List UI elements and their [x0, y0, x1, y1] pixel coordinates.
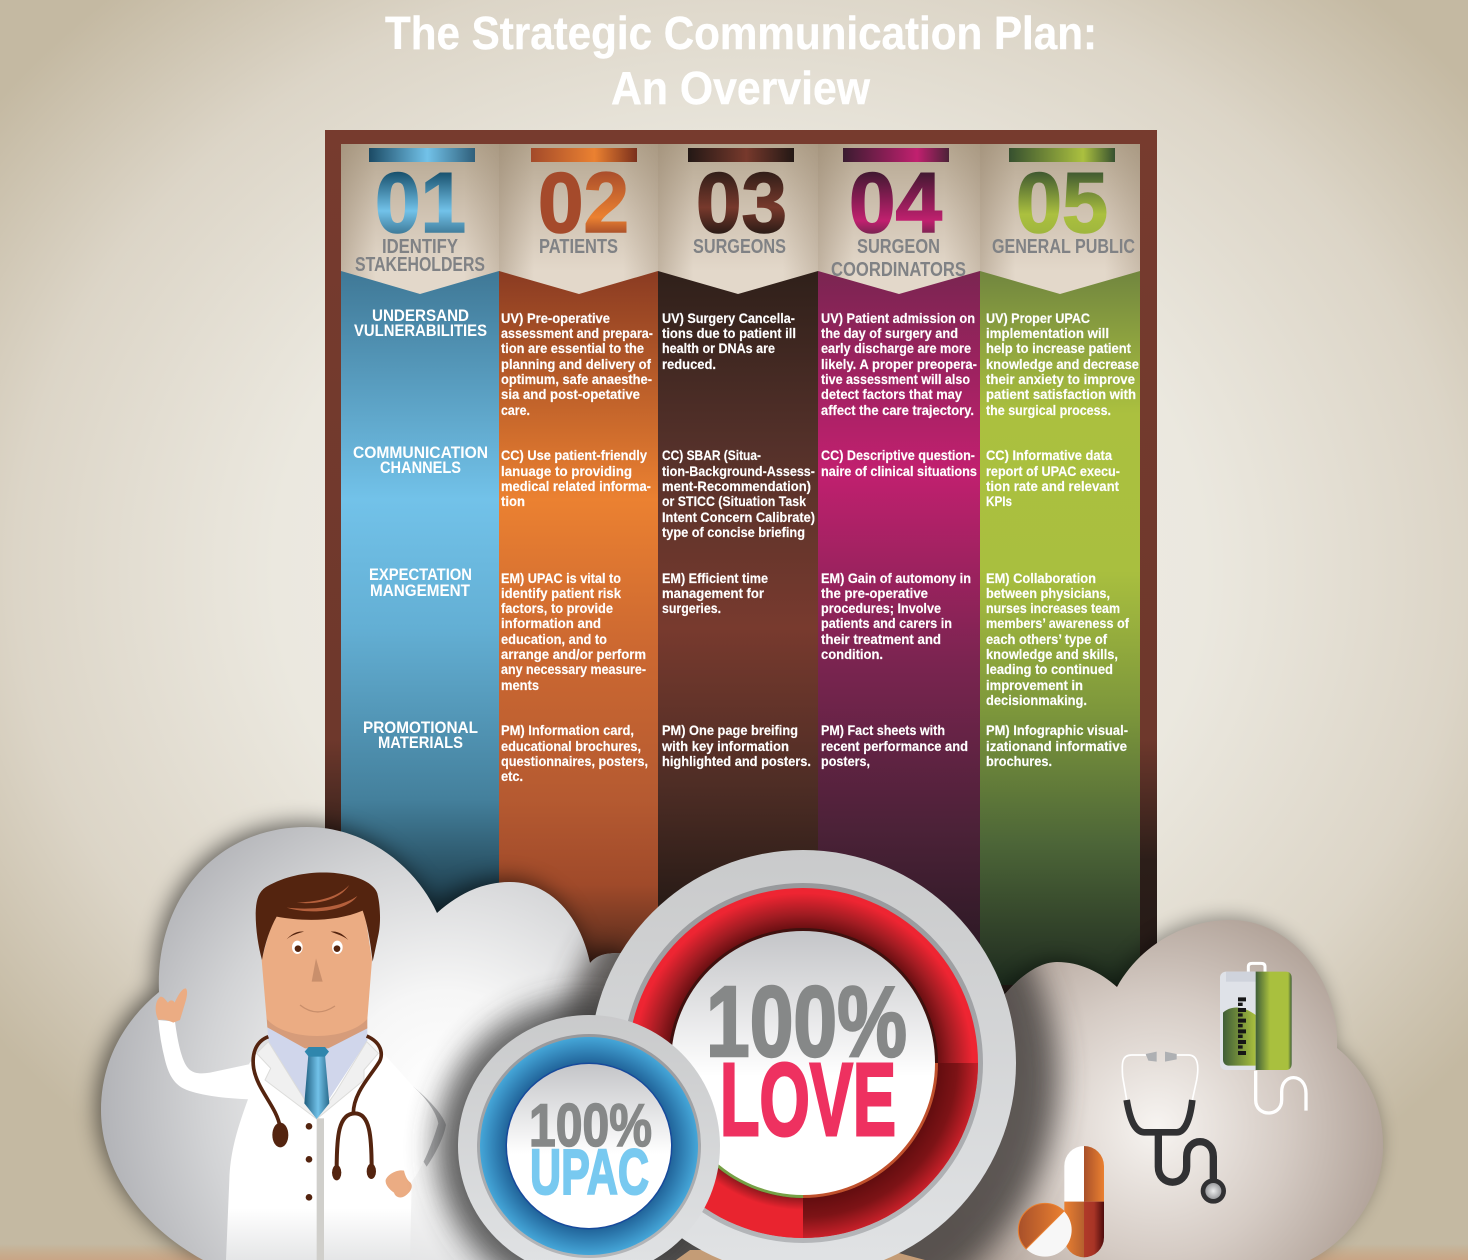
- column 4: surgeon coordinators: [818, 144, 980, 985]
- lapels: [257, 1042, 317, 1119]
- column 5: general public: members’ awareness of: [986, 616, 1129, 631]
- column 4: surgeon coordinators: PM) Fact sheets with: [821, 723, 945, 738]
- title: [385, 7, 1097, 114]
- column 3: surgeons: type of concise briefing: [662, 525, 805, 540]
- column 4: surgeon coordinators: their treatment and: [821, 632, 941, 647]
- column 3: surgeons: tions due to patient ill: [662, 326, 796, 341]
- column 2: patients: PATIENTS: [539, 235, 618, 258]
- icon: stethoscope: [1122, 1052, 1226, 1204]
- cloud: left: [97, 823, 900, 1260]
- badge: 100% UPAC: 100%: [529, 1092, 652, 1159]
- column 3: surgeons: Intent Concern Calibrate): [662, 510, 815, 525]
- column 2: patients: etc.: [501, 769, 523, 784]
- column 5: general public: leading to continued: [986, 662, 1113, 677]
- column 4: surgeon coordinators: tive assessment will also: [821, 372, 970, 387]
- column 4: surgeon coordinators: the day of surgery and: [821, 326, 958, 341]
- badge: 100% LOVE: 100%: [706, 966, 907, 1078]
- column 2: patients: any necessary measure-: [501, 662, 646, 677]
- column 5: general public: knowledge and skills,: [986, 647, 1118, 662]
- column 2: patients: UV) Pre-operative: [501, 311, 610, 326]
- title: An Overview: [611, 62, 870, 114]
- column 1: identify stakeholders: 01: [375, 156, 466, 251]
- column 5: general public: between physicians,: [986, 586, 1110, 601]
- column 2: patients: CC) Use patient-friendly: [501, 448, 648, 463]
- eyes: [287, 931, 348, 954]
- column 1: identify stakeholders: CHANNELS: [380, 459, 461, 477]
- column 4: surgeon coordinators: EM) Gain of automony in: [821, 571, 971, 586]
- column 1: identify stakeholders: PROMOTIONAL: [363, 719, 478, 737]
- raised arm: [158, 1020, 253, 1099]
- column 4: surgeon coordinators: COORDINATORS: [831, 258, 966, 281]
- icon: IV bag: [1220, 963, 1306, 1113]
- column 5: general public: the surgical process.: [986, 403, 1111, 418]
- hair: [256, 872, 380, 962]
- column 4: surgeon coordinators: SURGEON: [857, 235, 940, 258]
- column 2: patients: EM) UPAC is vital to: [501, 571, 621, 586]
- column 2: patients: questionnaires, posters,: [501, 754, 648, 769]
- column 5: general public: report of UPAC execu-: [986, 464, 1120, 479]
- mouth: [300, 1005, 335, 1012]
- hair highlight: [287, 885, 357, 911]
- stethoscope: [253, 1036, 381, 1180]
- column 5: general public: nurses increases team: [986, 601, 1120, 616]
- column 4: surgeon coordinators: posters,: [821, 754, 870, 769]
- neck: [267, 1018, 367, 1048]
- column 2: patients: assessment and prepara-: [501, 326, 653, 341]
- column 2: patients: factors, to provide: [501, 601, 613, 616]
- column 3: surgeons: surgeries.: [662, 601, 721, 616]
- column 1: identify stakeholders: EXPECTATION: [369, 566, 472, 584]
- column 4: surgeon coordinators: early discharge are more: [821, 341, 971, 356]
- column 2: patients: identify patient risk: [501, 586, 622, 601]
- badge: 100% LOVE: [590, 850, 1016, 1260]
- column 4: surgeon coordinators: procedures; Involve: [821, 601, 941, 616]
- column 5: general public: PM) Infographic visual-: [986, 723, 1128, 738]
- column 4: surgeon coordinators: likely. A proper preopera-: [821, 357, 977, 372]
- badge: 100% LOVE: LOVE: [720, 1042, 896, 1157]
- column 3: surgeons: health or DNAs are: [662, 341, 775, 356]
- tie: [304, 1055, 329, 1119]
- column 1: identify stakeholders: IDENTIFY: [382, 235, 458, 258]
- column 2: patients: planning and delivery of: [501, 357, 652, 372]
- column 3: surgeons: or STICC (Situation Task: [662, 494, 806, 509]
- pointing hand: [156, 988, 187, 1023]
- column 4: surgeon coordinators: CC) Descriptive question-: [821, 448, 975, 463]
- column 2: patients: medical related informa-: [501, 479, 651, 494]
- nose: [312, 958, 323, 982]
- column 4: surgeon coordinators: condition.: [821, 647, 883, 662]
- badge shadows: [414, 932, 1080, 1260]
- column 2: patients: tion are essential to the: [501, 341, 644, 356]
- coat buttons: [306, 1123, 312, 1201]
- column 3: surgeons: highlighted and posters.: [662, 754, 811, 769]
- face: [262, 903, 372, 1036]
- board frame: [325, 130, 1157, 1000]
- column 3: surgeons: SURGEONS: [693, 235, 786, 258]
- column 2: patients: educational brochures,: [501, 739, 641, 754]
- column 5: general public: brochures.: [986, 754, 1052, 769]
- column 1: identify stakeholders: [341, 144, 499, 985]
- column 2: patients: sia and post-opetative: [501, 387, 640, 402]
- column 5: general public: each others’ type of: [986, 632, 1108, 647]
- fist: [386, 1170, 412, 1198]
- column 5: general public: help to increase patient: [986, 341, 1132, 356]
- column 2: patients: 02: [538, 156, 629, 251]
- column 3: surgeons: reduced.: [662, 357, 716, 372]
- column 4: surgeon coordinators: patients and carers in: [821, 616, 952, 631]
- column 2: patients: optimum, safe anaesthe-: [501, 372, 652, 387]
- column 3: surgeons: tion-Background-Assess-: [662, 464, 815, 479]
- column 3: surgeons: PM) One page breifing: [662, 723, 798, 738]
- cloud: right: [857, 917, 1383, 1260]
- column 4: surgeon coordinators: naire of clinical situations: [821, 464, 977, 479]
- column 4: surgeon coordinators: UV) Patient admission on: [821, 311, 975, 326]
- column 5: general public: izationand informative: [986, 739, 1127, 754]
- column 5: general public: UV) Proper UPAC: [986, 311, 1090, 326]
- column 2: patients: care.: [501, 403, 530, 418]
- column 5: general public: implementation will: [986, 326, 1109, 341]
- column 2: patients: information and: [501, 616, 601, 631]
- column 4: surgeon coordinators: recent performance and: [821, 739, 968, 754]
- shirt: [267, 1027, 367, 1119]
- coat: [226, 1053, 438, 1260]
- column 2: patients: lanuage to providing: [501, 464, 632, 479]
- column 1: identify stakeholders: MATERIALS: [378, 734, 463, 752]
- column 2: patients: education, and to: [501, 632, 607, 647]
- floor strip: [0, 1244, 1468, 1260]
- placket: [317, 1118, 324, 1260]
- column 3: surgeons: with key information: [661, 739, 789, 754]
- column 4: surgeon coordinators: detect factors that may: [821, 387, 963, 402]
- column 5: general public: CC) Informative data: [986, 448, 1113, 463]
- column 5: general public: improvement in: [986, 678, 1083, 693]
- column 5: general public: decisionmaking.: [986, 693, 1087, 708]
- floor gaps: [676, 1250, 925, 1260]
- column 3: surgeons: ment-Recommendation): [662, 479, 811, 494]
- badge: 100% UPAC: UPAC: [530, 1136, 649, 1208]
- doctor: [156, 872, 446, 1260]
- column 1: identify stakeholders: VULNERABILITIES: [354, 322, 487, 340]
- column 5: general public: 05: [1016, 156, 1108, 251]
- column 2: patients: [499, 144, 658, 985]
- badge: 100% UPAC: [458, 1015, 720, 1260]
- column 1: identify stakeholders: STAKEHOLDERS: [355, 253, 485, 276]
- column 2: patients: arrange and/or perform: [501, 647, 646, 662]
- column 1: identify stakeholders: UNDERSAND: [372, 307, 469, 325]
- title: The Strategic Communication Plan:: [385, 7, 1097, 59]
- column 2: patients: ments: [501, 678, 539, 693]
- column 1: identify stakeholders: COMMUNICATION: [353, 444, 488, 462]
- column 3: surgeons: [658, 144, 818, 985]
- column 3: surgeons: EM) Efficient time: [662, 571, 768, 586]
- column 5: general public: their anxiety to improve: [986, 372, 1135, 387]
- column 3: surgeons: CC) SBAR (Situa-: [662, 448, 761, 463]
- column 4: surgeon coordinators: the pre-operative: [821, 586, 928, 601]
- column 4: surgeon coordinators: 04: [849, 156, 942, 251]
- column 5: general public: knowledge and decrease: [986, 357, 1139, 372]
- column 5: general public: tion rate and relevant: [986, 479, 1120, 494]
- column 5: general public: KPIs: [986, 494, 1012, 509]
- column 1: identify stakeholders: MANGEMENT: [370, 582, 470, 600]
- column 2: patients: PM) Information card,: [501, 723, 634, 738]
- column 2: patients: tion: [501, 494, 525, 509]
- column 5: general public: [980, 144, 1140, 985]
- column 3: surgeons: management for: [662, 586, 765, 601]
- icon: pills: [1018, 1146, 1104, 1257]
- column 5: general public: patient satisfaction with: [986, 387, 1136, 402]
- column 3: surgeons: UV) Surgery Cancella-: [662, 311, 795, 326]
- column 4: surgeon coordinators: affect the care trajectory.: [821, 403, 974, 418]
- column 5: general public: GENERAL PUBLIC: [992, 235, 1135, 258]
- column 5: general public: EM) Collaboration: [986, 571, 1096, 586]
- column 3: surgeons: 03: [696, 156, 787, 251]
